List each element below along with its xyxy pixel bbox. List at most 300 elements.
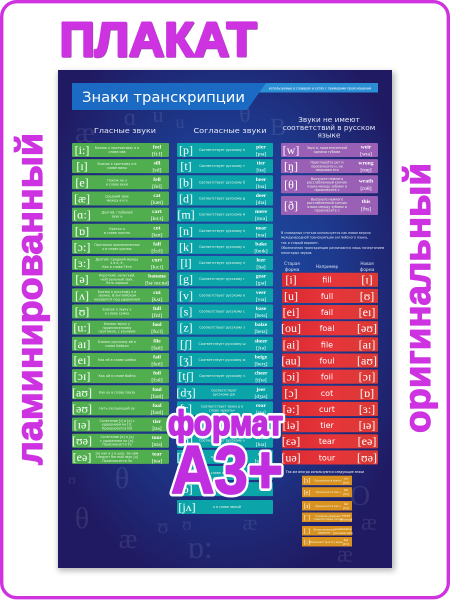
row ɔ:: [ɔ:] — [74, 240, 90, 254]
row w: Звук в, произнесенный — [307, 146, 347, 150]
row fail — [282, 305, 378, 319]
row 3: [ɔ] — [304, 504, 310, 510]
row i:: слове ива — [108, 150, 126, 154]
row jʌ: я в слове явный — [213, 505, 241, 509]
row foal: [əʊ] — [357, 321, 377, 335]
row ɒ: в слове плотно — [104, 231, 130, 235]
row foil: [ɔi] — [283, 370, 299, 384]
row 2: fell — [344, 488, 348, 492]
row 4 — [302, 512, 352, 522]
row foil: foil — [321, 373, 333, 382]
row t: Соответствует русскому т — [199, 164, 245, 168]
red table column headers: форма — [360, 267, 375, 272]
row θ: [θ] — [284, 177, 298, 191]
heading: ПЛАКАТ: ПЛАКАТ — [60, 14, 257, 68]
row ks: [sɪks] — [255, 458, 267, 464]
row h: hear — [256, 435, 267, 441]
row p: [pɪə] — [256, 152, 266, 158]
row g: [g] — [179, 272, 193, 286]
row z: [beɪz] — [254, 329, 268, 335]
red table column headers: Например — [316, 264, 338, 269]
row ʒ: [beɪʒ] — [254, 361, 268, 367]
row ɪə: Произносится ИЭ — [102, 427, 133, 431]
row eə — [72, 450, 169, 464]
row tour: tour — [319, 453, 336, 462]
row aɪ: слове Байкал — [105, 344, 129, 348]
badge: формат А3+ — [168, 404, 283, 508]
row 3: [fɔl] — [343, 506, 349, 510]
row jʌ: [jʌ] — [178, 500, 196, 514]
explanatory note — [281, 231, 385, 255]
row ks: [ks] — [177, 450, 195, 464]
row ʊ: Близок к звуку у — [103, 308, 132, 312]
explanatory note: некоторых звуков. — [281, 251, 312, 255]
faint phonetic symbols: θ — [75, 502, 89, 535]
row 6 — [302, 537, 352, 546]
row ʒ — [177, 353, 273, 367]
row z: [z] — [179, 321, 193, 335]
poster — [58, 70, 392, 568]
faint phonetic symbols: ʊ — [182, 514, 192, 534]
row tʃ: cheer — [254, 371, 268, 377]
row fill: [i] — [285, 273, 297, 287]
row dʒ: русскому дж — [213, 392, 235, 396]
row dʒ: Соответствует — [211, 388, 237, 392]
row i:: [fi:l] — [152, 150, 162, 158]
row ɪ: слове вилы — [107, 166, 127, 170]
row j: [jɪə, jɜ:] — [252, 426, 270, 432]
row ɪ: Близок к краткому и в — [97, 162, 137, 166]
row ʒ: [ʒ] — [179, 353, 193, 367]
row ɔ:: fall — [153, 241, 161, 247]
faint phonetic symbols: æ — [361, 510, 377, 536]
row m: Соответствует русскому м — [199, 213, 246, 217]
row θ — [281, 175, 378, 193]
row h: [hɪə] — [256, 442, 266, 448]
row foil — [282, 370, 378, 384]
row w: [w] — [283, 143, 299, 157]
row æ — [72, 191, 169, 206]
row d: [d] — [179, 191, 193, 205]
row ɑ:: Долгий, глубокий — [102, 211, 132, 215]
row ə — [72, 272, 169, 287]
row ʌ — [72, 288, 169, 303]
faint phonetic symbols: æ — [75, 116, 95, 149]
row e — [72, 175, 169, 190]
row foil: [ɔɪ] — [359, 370, 375, 384]
row ʊə: Сочетание [ʊ] и [ə] — [100, 435, 134, 439]
row z — [177, 321, 273, 335]
row ʃ: [ʃ] — [180, 337, 192, 351]
column heading: no Russian equivalents — [283, 115, 375, 140]
row dʒ — [176, 385, 273, 400]
row cot: [ɒ] — [360, 386, 374, 400]
row n: near — [256, 225, 267, 231]
row p: pier — [256, 144, 266, 150]
panel: sounds without Russian equivalents — [281, 143, 378, 215]
row ɪ — [72, 159, 169, 174]
title banner — [72, 83, 378, 110]
row ð: [ð] — [284, 198, 298, 212]
row d — [177, 191, 273, 206]
row tear: [ɛə] — [282, 434, 300, 448]
row gz: в слове экзамен — [208, 471, 236, 475]
row ʊ: [ʊ] — [75, 304, 89, 318]
row ɔ: [ɔ] — [179, 482, 193, 496]
row n — [177, 224, 273, 238]
row ɪə: ударением на [ɪ]. — [102, 423, 132, 427]
row 3: fall — [344, 502, 348, 506]
row ʌ: находится под ударением — [94, 297, 141, 301]
row ɪə: tier — [153, 419, 162, 425]
row t: tier — [257, 161, 266, 167]
faint phonetic symbols: u — [152, 102, 164, 127]
row jʌ — [177, 500, 273, 514]
row tier: [iə] — [283, 418, 299, 432]
row ʃ: sheer — [255, 338, 268, 344]
row h: [h] — [179, 434, 193, 448]
row ɜ:: [kɜ:t] — [151, 265, 163, 271]
row ɑ:: [ɑ:] — [73, 208, 91, 222]
column heading: no Russian equivalents: соответствий в русском — [283, 123, 375, 132]
row u:: произнесенному — [103, 326, 132, 330]
row tear: [eə] — [358, 434, 376, 448]
row m: [mɪə] — [255, 216, 267, 222]
row tour: [ʊə] — [357, 450, 377, 464]
row gz — [176, 466, 273, 480]
row ŋ: wrong — [358, 161, 374, 167]
row ʊə: с ударением на [ʊ]. — [100, 439, 134, 443]
row curt: [ə:] — [283, 402, 299, 416]
poster title: Знаки транскрипции — [82, 90, 245, 106]
row eɪ: Как ей в слове шейка — [98, 358, 136, 362]
row n: [nɪə] — [256, 232, 266, 238]
faint phonetic symbols: æ — [119, 524, 137, 555]
banner main — [72, 83, 266, 110]
row g — [177, 272, 273, 287]
row aɪ — [72, 337, 169, 351]
row i: — [72, 143, 169, 158]
row j: русскому й — [212, 425, 232, 429]
row full: [u] — [284, 289, 298, 303]
panel: vowels — [72, 143, 169, 464]
row 1: [kɔt] — [343, 481, 349, 485]
row ʌ: [ʌ] — [75, 288, 89, 302]
row b: beer — [256, 177, 267, 183]
row i:: [i:] — [75, 143, 89, 157]
row b: [b] — [179, 175, 193, 189]
row l: [l] — [180, 256, 192, 270]
row l: [lɪə] — [256, 265, 266, 271]
row θ: Высуньте немного — [311, 177, 343, 181]
panel: old and new transcription forms — [281, 273, 378, 465]
row aʊ: Как ау в слове пауза — [99, 390, 135, 394]
row əʊ: Нуть скользящий оу — [99, 406, 135, 410]
badge word: формат: формат — [168, 404, 283, 443]
row ə: нейтральный звук. — [100, 277, 134, 281]
row file: [ai] — [283, 337, 299, 351]
row ʌ: [kʌt] — [152, 297, 163, 303]
row ə: Короткий, нечеткий, — [99, 274, 135, 278]
row e: [fel] — [152, 183, 162, 190]
row θ: wrath — [359, 178, 374, 184]
row ʊ: в слове сумка — [105, 312, 129, 316]
row fill: [ɪ] — [361, 273, 373, 287]
row fail: [ei] — [283, 305, 299, 319]
row ɜ:: э и о, ё, — [110, 261, 124, 265]
row ʃ: Соответствует русскому ш — [199, 342, 245, 346]
row 3 — [302, 501, 352, 510]
row g: Соответствует русскому г — [199, 277, 245, 281]
faint phonetic symbols: O — [350, 481, 370, 512]
row tour — [281, 450, 378, 465]
poster shadow — [58, 72, 395, 571]
row 2: Произносится как э — [316, 491, 341, 494]
row g: [gɪə] — [256, 281, 266, 287]
row 4: [bəˈnɑ:nə] — [340, 518, 352, 522]
row v: [v] — [179, 288, 193, 302]
row æ: [æ] — [74, 191, 90, 205]
row cot: cot — [321, 389, 333, 398]
row e: [e] — [75, 175, 89, 189]
row aʊ: foul — [152, 387, 162, 393]
row dʒ: [dʒɪə] — [254, 394, 268, 400]
faint phonetic symbols: ɒ: — [187, 529, 213, 565]
row ð: Высуньте немного — [311, 198, 343, 202]
row æ: cat — [153, 193, 161, 199]
row h — [177, 434, 273, 448]
row ɔ — [177, 482, 273, 496]
row aʊ: [aʊ] — [72, 385, 92, 399]
side label: оригинальный: оригинальный — [397, 163, 438, 433]
row l: Соответствует русскому л — [199, 261, 245, 265]
row 4: [ˈ] — [304, 516, 310, 522]
row 5: ударение — [318, 532, 331, 534]
row θ: расслабленный кончик — [307, 181, 347, 185]
row əʊ — [72, 401, 169, 416]
row ɒ: Кратко о — [109, 227, 125, 231]
poster background — [58, 70, 392, 568]
row u:: Близок звуку у — [104, 322, 130, 326]
row j: [j] — [180, 418, 192, 432]
red table column headers: Старая — [284, 261, 300, 266]
faint phonetic symbols: æ — [243, 510, 257, 535]
row ɔɪ: foil — [153, 371, 161, 377]
row ʊ: [fʊl] — [152, 312, 162, 319]
heading: ПЛАКАТ: ПЛАКАТ — [60, 14, 256, 67]
faint phonetic symbols: ʊ — [68, 473, 76, 488]
row e: fell — [153, 177, 161, 183]
red table column headers: Новая — [360, 261, 374, 266]
row tʃ: [tʃɪə] — [255, 378, 267, 384]
row d: deer — [256, 193, 267, 199]
column heading: consonants: Согласные звуки — [194, 126, 267, 135]
row tier: tier — [320, 421, 334, 430]
row foul: [aʊ] — [357, 353, 377, 367]
row 1: Произносится кратко — [314, 480, 342, 483]
row w: [wɪə] — [360, 152, 372, 158]
row ð: [ðɪs] — [361, 206, 371, 212]
explanatory note: В словарных статьях используется как новая версия — [281, 231, 371, 235]
explanatory note: Обозначения транскрипции различаются лишь начертанием — [281, 246, 385, 250]
row k: Соответствует русскому к — [199, 245, 245, 249]
row ə: [bəˈnɑ:nə] — [145, 281, 169, 287]
row eə: [teə] — [152, 458, 162, 464]
row s: Соответствует русскому с — [199, 310, 245, 314]
row s — [177, 304, 273, 319]
row ɔɪ: [fɔɪl] — [151, 377, 163, 384]
row ʊə: tour — [152, 435, 163, 441]
row r: слове «ржать» — [209, 408, 235, 412]
row ks: six — [258, 451, 264, 457]
row 5: Второстепенное — [314, 528, 335, 532]
row aɪ: file — [153, 338, 161, 344]
row eə: tear — [152, 451, 162, 457]
row j: year — [256, 419, 267, 425]
row dʒ: jeer — [255, 387, 266, 393]
row ŋ — [281, 159, 378, 174]
badge size: А3+: А3+ — [171, 432, 283, 508]
row foal: foal — [320, 324, 334, 333]
row ɔ:: о в слове кролик — [102, 247, 132, 251]
row 4: Основное ударение — [316, 515, 341, 518]
row ɪə — [72, 418, 169, 432]
row ɜ:: Долгий. Средний между — [96, 258, 138, 262]
row tear — [282, 434, 378, 448]
row l — [177, 256, 273, 271]
row tʃ: [tʃ] — [178, 369, 194, 383]
faint phonetic symbols: B — [270, 115, 286, 141]
row əʊ: foal — [152, 403, 162, 409]
row j: Соответствует — [209, 421, 235, 425]
row θ: [rɒθ] — [360, 186, 372, 192]
row 2: [e] — [304, 491, 310, 497]
row b: Соответствует русскому б — [199, 180, 245, 184]
row ɪə: Сочетание [ɪ] и [ə] с — [99, 419, 135, 423]
row z: baize — [255, 322, 268, 328]
column heading: vowels: Гласные звуки — [94, 126, 156, 135]
explanatory note: так и старый вариант. — [281, 241, 319, 245]
row ʒ: Соответствует русскому ж — [199, 358, 245, 362]
row ɔɪ: Как ой в слове бойня — [99, 374, 135, 378]
row ʒ: beige — [255, 354, 268, 360]
row eə: [e] как в э в шее. За ним — [96, 451, 139, 455]
row m: mere — [255, 209, 268, 215]
row v: veer — [256, 290, 267, 296]
row v: Соответствует русскому в — [199, 293, 245, 297]
row 1: cot — [344, 477, 348, 481]
row ɔ:: Протяжно произнесенное — [94, 243, 140, 247]
row t — [177, 159, 273, 174]
row ʊə: Произносится Уэ — [102, 443, 132, 447]
row i:: feel — [153, 144, 162, 150]
row ɔɪ — [72, 369, 169, 384]
row fail: [eɪ] — [359, 305, 375, 319]
row n: Соответствует русскому н — [199, 229, 245, 233]
row b — [177, 175, 273, 190]
row r — [177, 401, 273, 416]
row ð: произнесите з — [314, 209, 340, 213]
panel: additional signs — [302, 476, 352, 546]
row m — [177, 208, 273, 222]
column heading: no Russian equivalents: Звуки не имеют — [298, 115, 360, 124]
red table column headers — [284, 261, 375, 272]
row æ: Средний звук — [105, 194, 129, 198]
row u:: fool — [152, 322, 162, 328]
row k — [177, 240, 273, 254]
row ʌ: звонке. В английском — [98, 294, 136, 298]
row full: [ʊ] — [360, 289, 374, 303]
row 6: Обозначает долготу звука — [309, 541, 343, 544]
row file: file — [321, 340, 333, 349]
row ə: [ə] — [75, 272, 89, 286]
row əʊ: [əʊ] — [72, 401, 92, 415]
row ʌ: cut — [153, 290, 161, 296]
row gz: [gz] — [176, 466, 196, 480]
row ɪ: [sɪl] — [152, 168, 162, 174]
banner caption: используемые в словарях и сетях с примерами произношения — [269, 86, 371, 90]
row ŋ: Приоткройте рот и — [310, 161, 344, 165]
row p: [p] — [179, 143, 193, 157]
row aɪ: Близко русскому ай в — [98, 340, 136, 344]
row 2: [fel] — [343, 492, 349, 496]
row ɪə: [tɪə] — [152, 426, 162, 432]
row k: bake — [255, 241, 267, 247]
row eɪ: fail — [153, 354, 161, 360]
row θ: языка между зубами и — [307, 184, 347, 188]
row m: [m] — [177, 208, 195, 222]
row ʊ — [72, 304, 169, 319]
row ks: в слове кекс — [211, 455, 233, 459]
row b: [bɪə] — [256, 184, 266, 190]
row curt: [ɜ:] — [359, 402, 375, 416]
row l: leer — [256, 258, 266, 264]
row ŋ: [rɒŋ] — [360, 168, 372, 174]
faint phonetic symbols: ɑ — [124, 105, 136, 131]
row 6: [:] — [304, 540, 310, 546]
row i:: Близок к протяжному и в — [95, 146, 139, 150]
row g: gear — [256, 274, 267, 280]
row ɜ: — [72, 256, 169, 271]
row h: Соответствует русскому х — [199, 439, 245, 443]
row w: одними губами — [314, 150, 340, 154]
row n: [n] — [179, 224, 193, 238]
row θ: произнесите с — [314, 188, 340, 192]
row ð: языка между зубами и — [307, 205, 347, 209]
row eɪ: [eɪ] — [74, 353, 90, 367]
row ɒ: [kɒt] — [151, 232, 163, 238]
row tʃ — [177, 369, 273, 384]
row fill — [282, 273, 378, 287]
row ɑ: — [72, 208, 169, 222]
row foul — [281, 353, 378, 368]
red table column headers: форма — [285, 267, 300, 272]
row j — [177, 418, 273, 432]
row u:: протяжно, с усилием — [99, 330, 136, 334]
row ɜ:: Как в слове Гёте — [102, 265, 132, 269]
row v — [177, 288, 273, 303]
faint phonetic symbols — [68, 102, 377, 568]
row ŋ: закрывая его — [315, 168, 339, 172]
row u: — [72, 321, 169, 335]
row 5: pronunciation — [335, 527, 352, 531]
faint phonetic symbols: ʊ — [158, 516, 169, 538]
row foal: [ou] — [281, 321, 301, 335]
row ʊə: [tʊə] — [152, 442, 163, 448]
badge size: А3+: А3+ — [171, 432, 283, 508]
row ɜ:: [ɜ:] — [74, 256, 90, 270]
row d: Соответствует русскому д — [199, 196, 246, 200]
